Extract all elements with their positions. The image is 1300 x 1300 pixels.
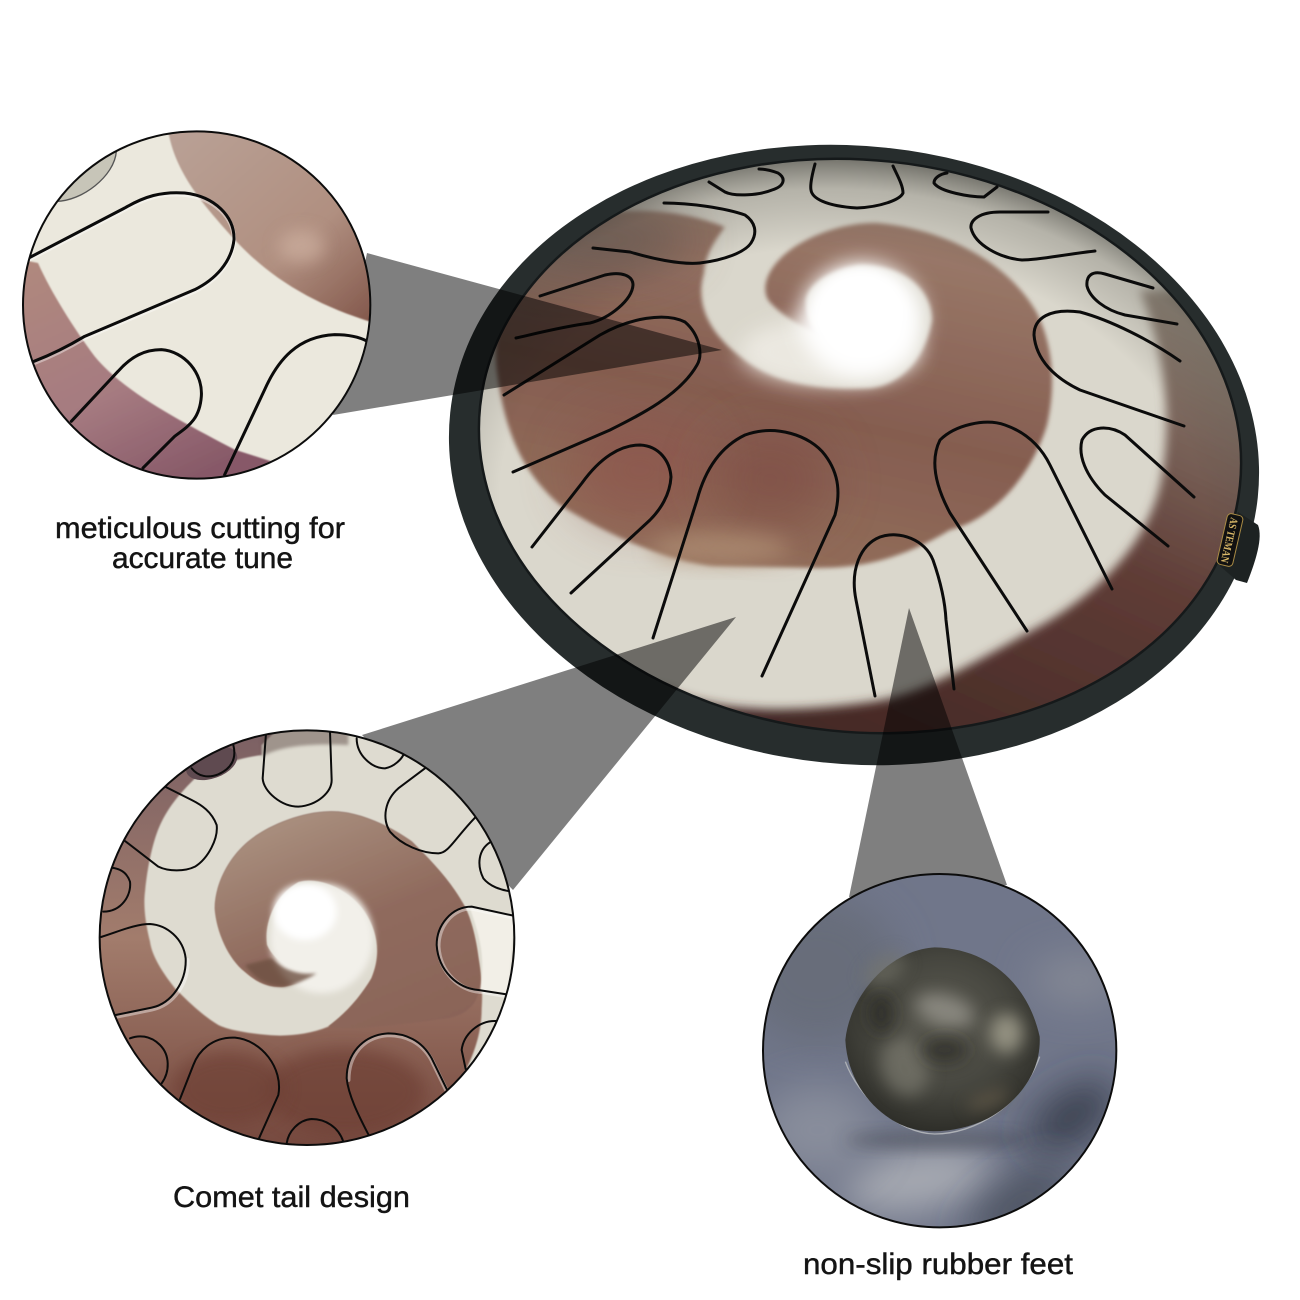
- callout beam: cutting detail: [333, 253, 722, 415]
- foot dome: [845, 946, 1040, 1134]
- main tongue drum: [448, 144, 1260, 766]
- detail circle: rubber foot: [762, 873, 1118, 1228]
- caption: cutting: accurate tune: [112, 542, 293, 575]
- tone tongues: [504, 164, 1194, 696]
- ring inner edge: [450, 122, 1270, 770]
- caption: rubber feet: non-slip rubber feet: [803, 1248, 1074, 1281]
- caption: comet tail: Comet tail design: [173, 1181, 410, 1214]
- brand tab: [1216, 512, 1260, 583]
- brand tab: AS TEMAN: [1218, 516, 1240, 564]
- detail circle: meticulous cutting: [18, 130, 385, 500]
- callout beam: comet tail detail: [362, 617, 736, 890]
- caption: cutting: meticulous cutting for: [55, 512, 345, 545]
- detail circle: comet tail: [95, 725, 522, 1152]
- drum surface: [480, 160, 1240, 732]
- callout beam: rubber feet detail: [849, 608, 1007, 897]
- rubber ring: [418, 105, 1290, 805]
